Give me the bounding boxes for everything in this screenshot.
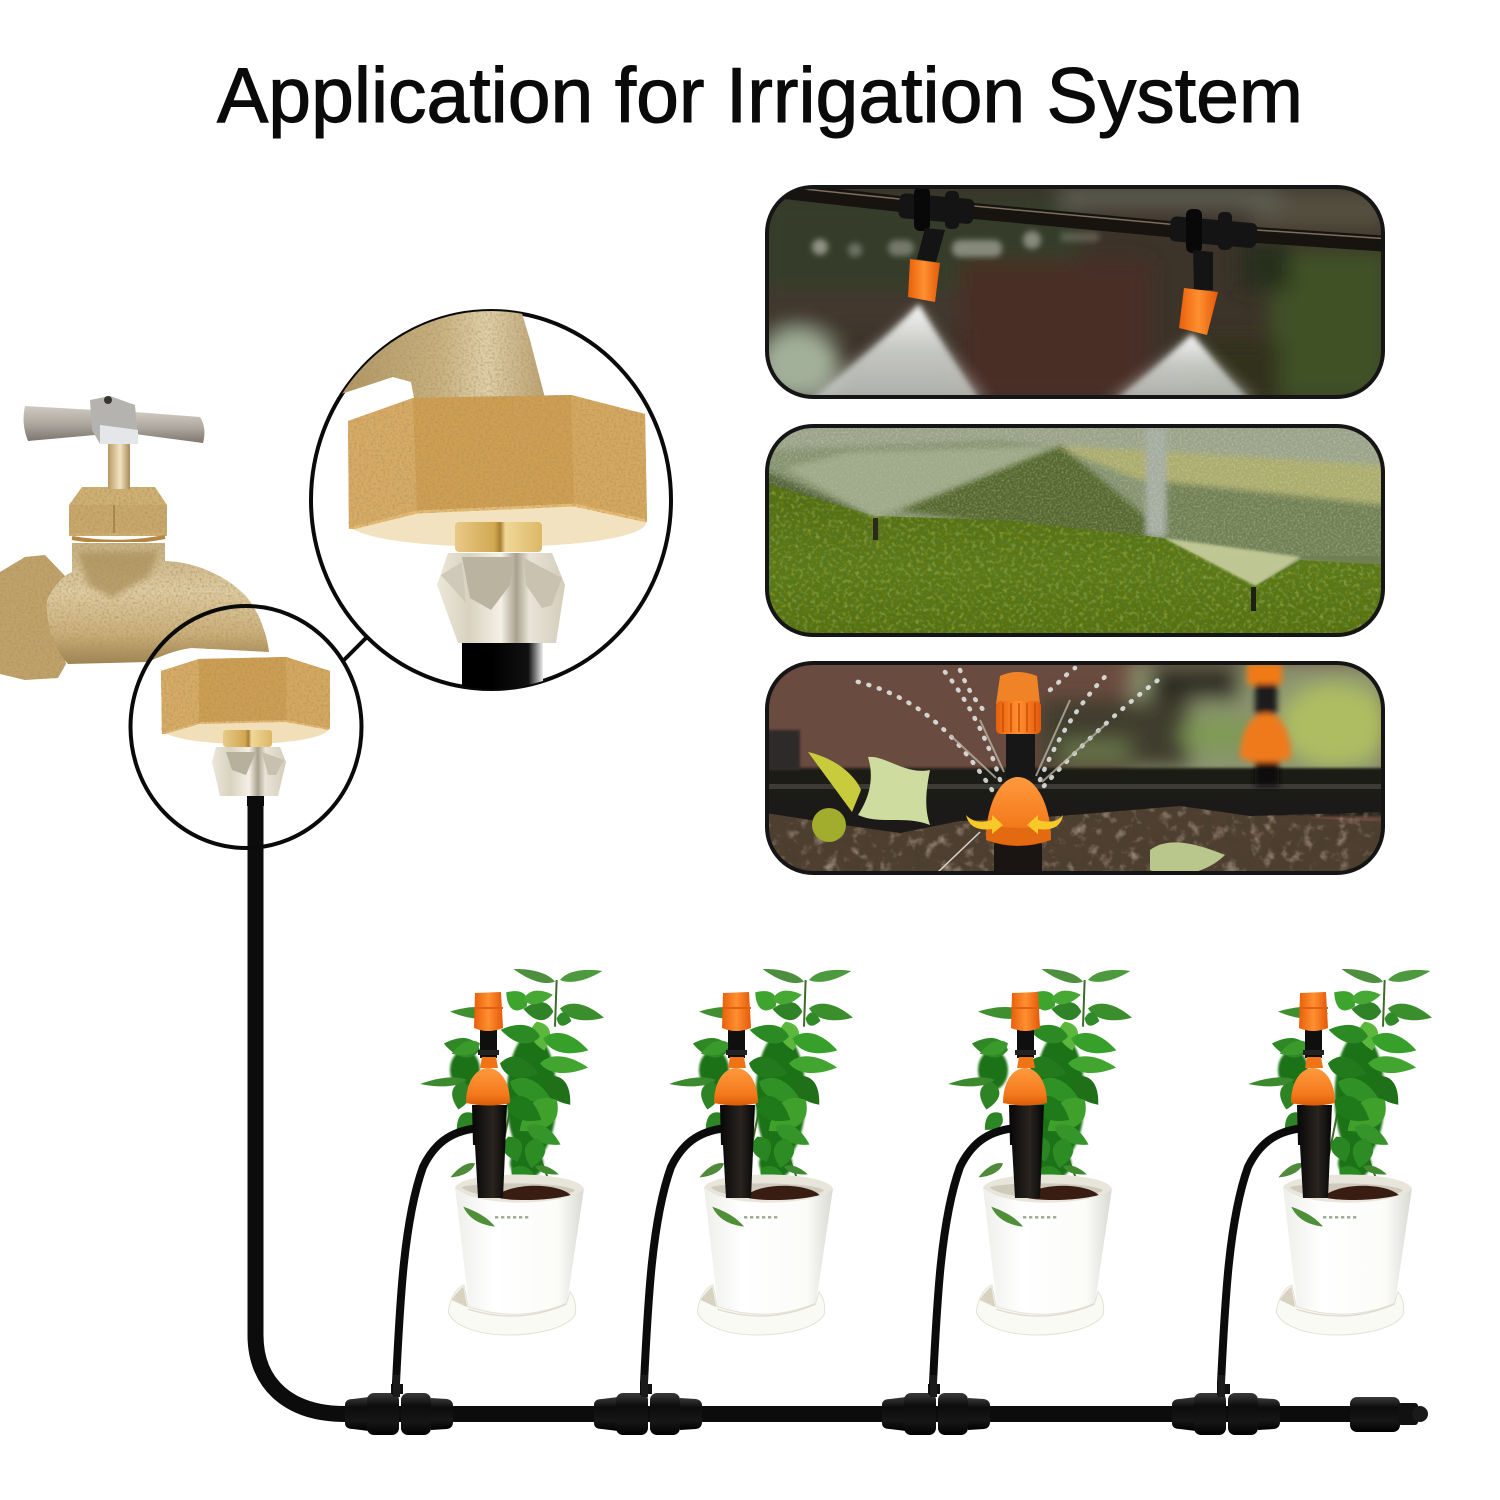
- orange nozzle 2: [1179, 288, 1218, 335]
- large brass hex nut: [348, 395, 647, 529]
- main horizontal fittings: [345, 1384, 1428, 1435]
- small silver nut: [212, 747, 286, 796]
- faucet spout body: [47, 543, 269, 664]
- small underside: [161, 712, 329, 744]
- valve nut: [69, 487, 167, 542]
- main black water tube: [256, 797, 1360, 1414]
- spray cone right: [1164, 538, 1301, 586]
- yellow arrows: [966, 815, 1063, 834]
- small brass hex nut: [161, 657, 330, 734]
- spray cone left: [785, 446, 1060, 518]
- spray cone 2: [1105, 334, 1260, 400]
- end cap: [1350, 1397, 1428, 1432]
- faucet: [0, 396, 269, 680]
- dripper with feed tube 1: [393, 992, 510, 1397]
- dripper with feed tube 3: [930, 992, 1047, 1397]
- small zoom circle with fitting: [130, 606, 362, 848]
- leaves: [808, 752, 1225, 875]
- potted plant 4: [1248, 965, 1434, 1335]
- large collar: [455, 522, 542, 552]
- spray cone 1: [800, 304, 990, 400]
- dripper with feed tube 2: [641, 992, 758, 1397]
- water droplet jets: [850, 668, 1165, 790]
- pointer line: [936, 832, 980, 874]
- panel: misting nozzles on overhead pipe: [756, 185, 1390, 401]
- title: Application for Irrigation System: [217, 51, 1303, 139]
- panel: pop-up sprinklers on grass: [765, 424, 1385, 639]
- large underside: [348, 506, 646, 546]
- tee fitting 2: [1169, 209, 1258, 290]
- sprinkler stake right: [1251, 587, 1256, 611]
- dripper with feed tube 4: [1218, 992, 1335, 1397]
- orange nozzle 1: [908, 259, 940, 302]
- connector line between zoom circles: [343, 636, 368, 661]
- overhead pipe: [785, 191, 1390, 244]
- soil: [769, 806, 1381, 871]
- tee 3: [882, 1384, 990, 1435]
- main sprinkler: [986, 672, 1051, 880]
- tee 1: [345, 1384, 453, 1435]
- grass lawn: [765, 483, 1385, 639]
- potted plant 1: [420, 965, 606, 1335]
- left thread nut: [0, 555, 66, 680]
- background sprinkler: [1240, 663, 1291, 786]
- black planter trough: [765, 730, 1385, 816]
- t-handle: [24, 396, 204, 444]
- sprinkler stake left: [873, 518, 878, 540]
- tee 4: [1172, 1384, 1280, 1435]
- large black tube: [462, 643, 543, 693]
- neck shading: [78, 552, 158, 598]
- large zoom circle with fitting: [311, 300, 671, 693]
- tee 2: [594, 1384, 702, 1435]
- large silver nut: [437, 553, 565, 643]
- small collar: [223, 730, 272, 747]
- potted plant 2: [669, 965, 855, 1335]
- tee fitting 1: [898, 187, 975, 262]
- potted plant 3: [948, 965, 1134, 1335]
- spout detail: [342, 311, 544, 398]
- panel: adjustable sprinkler in soil: [765, 661, 1390, 880]
- small tube tip under fitting: [247, 796, 264, 806]
- valve stem: [108, 443, 130, 489]
